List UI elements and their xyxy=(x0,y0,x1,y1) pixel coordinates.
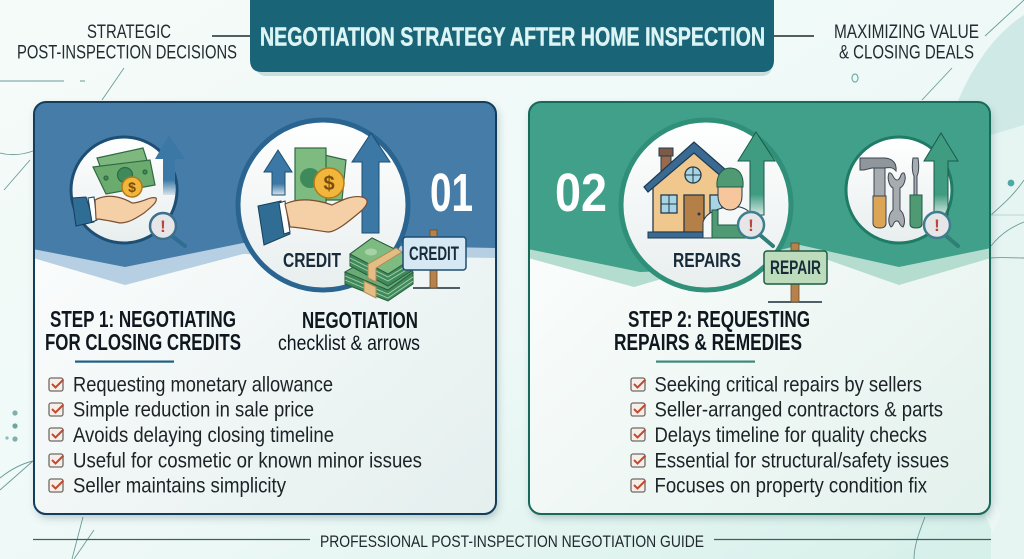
credit signpost: CREDIT xyxy=(409,244,459,265)
repair signpost: REPAIR xyxy=(770,258,821,279)
checklist: credits: Useful for cosmetic or known minor issues xyxy=(73,450,422,473)
icon: hand with cash xyxy=(71,135,185,243)
checklist: repairs: Delays timeline for quality checks xyxy=(654,424,927,447)
checklist: repairs: Focuses on property condition fix xyxy=(654,475,927,498)
icon: magnifier alert xyxy=(150,213,185,246)
checklist: repairs xyxy=(631,374,949,498)
checklist: repairs: Seller-arranged contractors & parts xyxy=(654,399,943,422)
subheading: negotiation checklist: checklist & arrows xyxy=(278,332,420,355)
icon: large credit circle xyxy=(238,120,408,290)
heading: step 1: FOR CLOSING CREDITS xyxy=(45,329,241,355)
checklist: credits: Requesting monetary allowance xyxy=(73,374,333,397)
icon: cash stack xyxy=(345,238,413,301)
checklist: credits: Avoids delaying closing timeline xyxy=(73,424,334,447)
icon: magnifier alert: ! xyxy=(160,217,166,236)
title banner: NEGOTIATION STRATEGY AFTER HOME INSPECTION xyxy=(260,22,765,52)
heading: step 1: STEP 1: NEGOTIATING xyxy=(50,306,236,332)
icon: large credit circle: $ xyxy=(323,173,335,195)
icon: tools circle: ! xyxy=(934,216,940,235)
left tagline: POST-INSPECTION DECISIONS xyxy=(17,42,237,64)
checklist: credits: Seller maintains simplicity xyxy=(73,475,286,498)
panel header band xyxy=(33,100,497,285)
icon: hand with cash: $ xyxy=(128,179,136,195)
checklist: repairs: Seeking critical repairs by sellers xyxy=(654,374,922,397)
subheading: negotiation checklist: NEGOTIATION xyxy=(302,307,418,333)
subheading: negotiation checklist xyxy=(278,307,420,355)
footer guide line: PROFESSIONAL POST-INSPECTION NEGOTIATION GUIDE xyxy=(320,532,704,551)
heading: step 2 xyxy=(614,306,810,355)
icon: house and contractor circle: REPAIRS xyxy=(673,250,741,272)
panel card xyxy=(34,102,496,514)
heading: step 1 xyxy=(45,306,241,355)
step number 02: 02 xyxy=(555,163,607,223)
panel: repairs xyxy=(528,100,991,514)
icon: large credit circle: CREDIT xyxy=(283,250,341,272)
panel header band xyxy=(528,100,991,287)
icon: house and contractor circle xyxy=(621,120,791,290)
right tagline: MAXIMIZING VALUE xyxy=(834,22,979,43)
step number 01: 01 xyxy=(430,163,473,223)
checklist: credits: Simple reduction in sale price xyxy=(73,399,314,422)
left tagline xyxy=(17,22,237,64)
panel: closing credits xyxy=(33,100,497,514)
panel card xyxy=(529,102,990,514)
connector lines xyxy=(212,35,814,37)
credit signpost xyxy=(403,230,466,288)
heading: step 2: STEP 2: REQUESTING xyxy=(628,306,810,332)
icon: tools circle xyxy=(846,133,958,246)
icon: house and contractor circle: ! xyxy=(748,216,754,235)
right tagline xyxy=(834,22,979,64)
left tagline: STRATEGIC xyxy=(87,22,171,43)
checklist: repairs: Essential for structural/safety issues xyxy=(654,450,949,473)
heading: step 2: REPAIRS & REMEDIES xyxy=(614,329,802,355)
checklist: credits xyxy=(49,374,422,498)
right tagline: & CLOSING DEALS xyxy=(839,42,974,64)
repair signpost xyxy=(764,243,827,302)
title banner xyxy=(250,0,774,76)
